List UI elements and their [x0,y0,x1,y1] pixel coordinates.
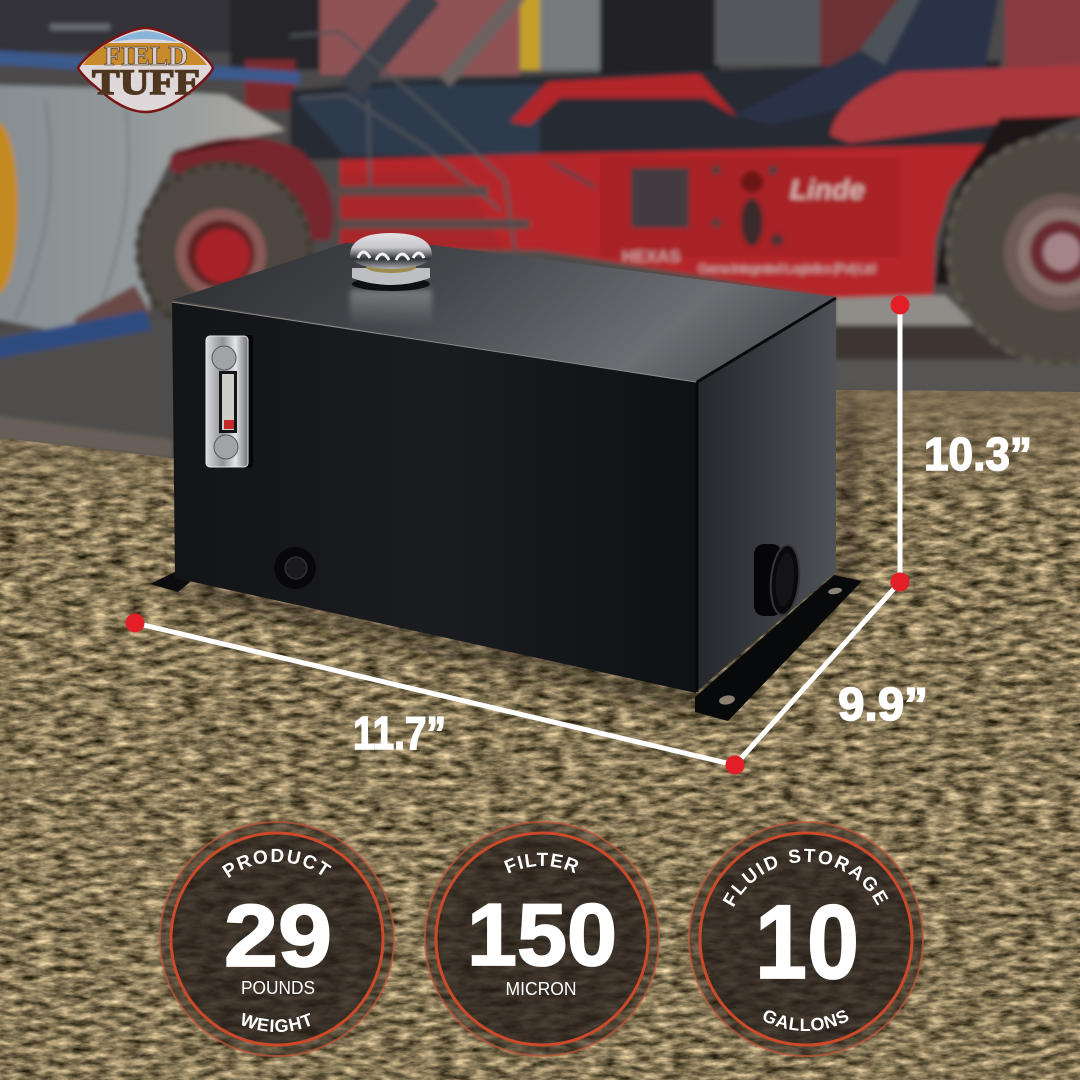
red body [340,145,985,298]
tank front face [172,302,696,693]
badge: product weight 29 pounds: WEIGHT [242,1012,310,1032]
logo: Field Tuff [78,28,213,112]
badge: fluid storage 10 gallons: FLUID STORAGE [722,848,888,907]
gravel ground [0,380,1080,1080]
cap reflection [350,290,432,326]
forklift panel details: Linde [790,174,865,205]
badge: product weight 29 pounds [159,821,395,1057]
tank right face [696,298,836,692]
containers and machinery backdrop [0,0,1080,110]
right fender [830,65,1080,143]
badge: filter 150 micron: 150 [467,885,617,984]
dimension: depth 9.9 inches [735,572,928,765]
left tire [136,137,334,338]
right tire [946,134,1080,366]
blue base beam [0,310,152,360]
upper red housing [510,74,737,125]
badge: product weight 29 pounds: POUNDS [241,977,315,998]
forklift panel details [550,162,876,276]
blue frame beam [0,50,300,84]
product: hydraulic tank [150,233,862,721]
dark machine center [290,60,1000,160]
sight level gauge [206,335,253,468]
white tanker [0,85,285,330]
badge: filter 150 micron [424,821,660,1057]
front port fitting [274,547,316,589]
dimension: depth 9.9 inches: 9.9” [838,678,928,730]
badge: filter 150 micron: FILTER [504,852,578,874]
right mounting flange [695,575,862,721]
badge: filter 150 micron: MICRON [506,978,576,999]
tank shadow [150,400,860,715]
steps and stair rails [290,32,530,250]
dimension: height 10.3 inches: 10.3” [924,428,1032,480]
side port fitting [754,544,802,616]
chrome filler cap [350,233,432,291]
grey ground [0,250,1080,470]
booms [350,0,430,90]
tank top face [172,243,836,382]
badge: fluid storage 10 gallons: 10 [755,884,859,1001]
left mounting flange [150,572,190,592]
badge: fluid storage 10 gallons: GALLONS [763,1010,848,1031]
badge: product weight 29 pounds: 29 [224,886,332,985]
logo: Field Tuff: FIELD [104,41,188,71]
logo: Field Tuff: TUFF [92,62,200,102]
badge: fluid storage 10 gallons [688,821,924,1057]
forklift panel details: HEXAS [622,247,681,266]
dimension: width 11.7 inches [126,614,744,774]
forklift panel details: Gama Integrated Logistics (Pvt) Ltd [698,261,876,276]
dimension: height 10.3 inches [890,296,1032,582]
badge: product weight 29 pounds: PRODUCT [222,848,332,878]
yellow tanker label [0,123,18,293]
background: blurred industrial yard with forklift [0,0,1080,470]
dimension: width 11.7 inches: 11.7” [353,707,446,759]
